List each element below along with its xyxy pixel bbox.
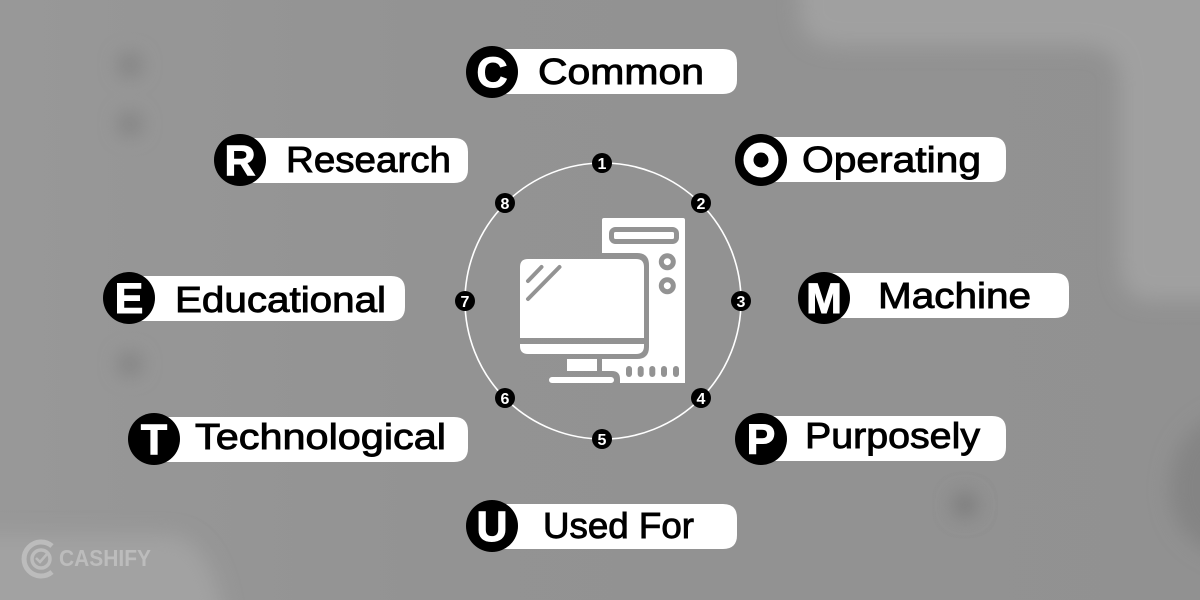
pill: Machine: M: [806, 275, 842, 323]
pill: Machine: Machine: [878, 275, 1031, 316]
pill: Common: C: [476, 49, 508, 97]
ring with numbered dots: 6: [501, 391, 510, 408]
pill: Educational: Educational: [175, 279, 386, 320]
pill: Educational: [103, 272, 405, 324]
pill: Technological: T: [141, 416, 167, 464]
pill: Machine: [798, 272, 1069, 324]
pill: Purposely: P: [747, 416, 775, 464]
ring with numbered dots: [455, 153, 751, 449]
ring with numbered dots: 8: [501, 196, 510, 213]
pill: Operating: [735, 134, 1006, 186]
ring with numbered dots: 4: [697, 391, 706, 408]
pill: Research: Research: [286, 139, 451, 180]
pill: Educational: E: [115, 275, 143, 323]
logo: Cashify: CASHIFY: [59, 545, 151, 571]
pill: Purposely: Purposely: [805, 415, 980, 456]
ring with numbered dots: 1: [598, 156, 607, 173]
pill: Technological: Technological: [195, 416, 446, 457]
ring with numbered dots: 3: [737, 294, 746, 311]
ring with numbered dots: 5: [598, 432, 607, 449]
pill: Used For: [466, 500, 737, 552]
pill: Operating: Operating: [802, 139, 981, 180]
pill: Purposely: [735, 413, 1006, 465]
pill: Research: R: [224, 137, 256, 185]
pill: Research: [214, 134, 468, 186]
logo: Cashify: [24, 542, 151, 576]
pill: Used For: Used For: [543, 505, 694, 546]
ring with numbered dots: 7: [461, 294, 470, 311]
pill: Common: Common: [538, 51, 704, 92]
pill: Used For: U: [476, 503, 508, 551]
icon: desktop computer: [520, 218, 685, 383]
pill: Technological: [128, 413, 468, 465]
ring with numbered dots: 2: [697, 196, 706, 213]
pill: Common: [466, 46, 737, 98]
